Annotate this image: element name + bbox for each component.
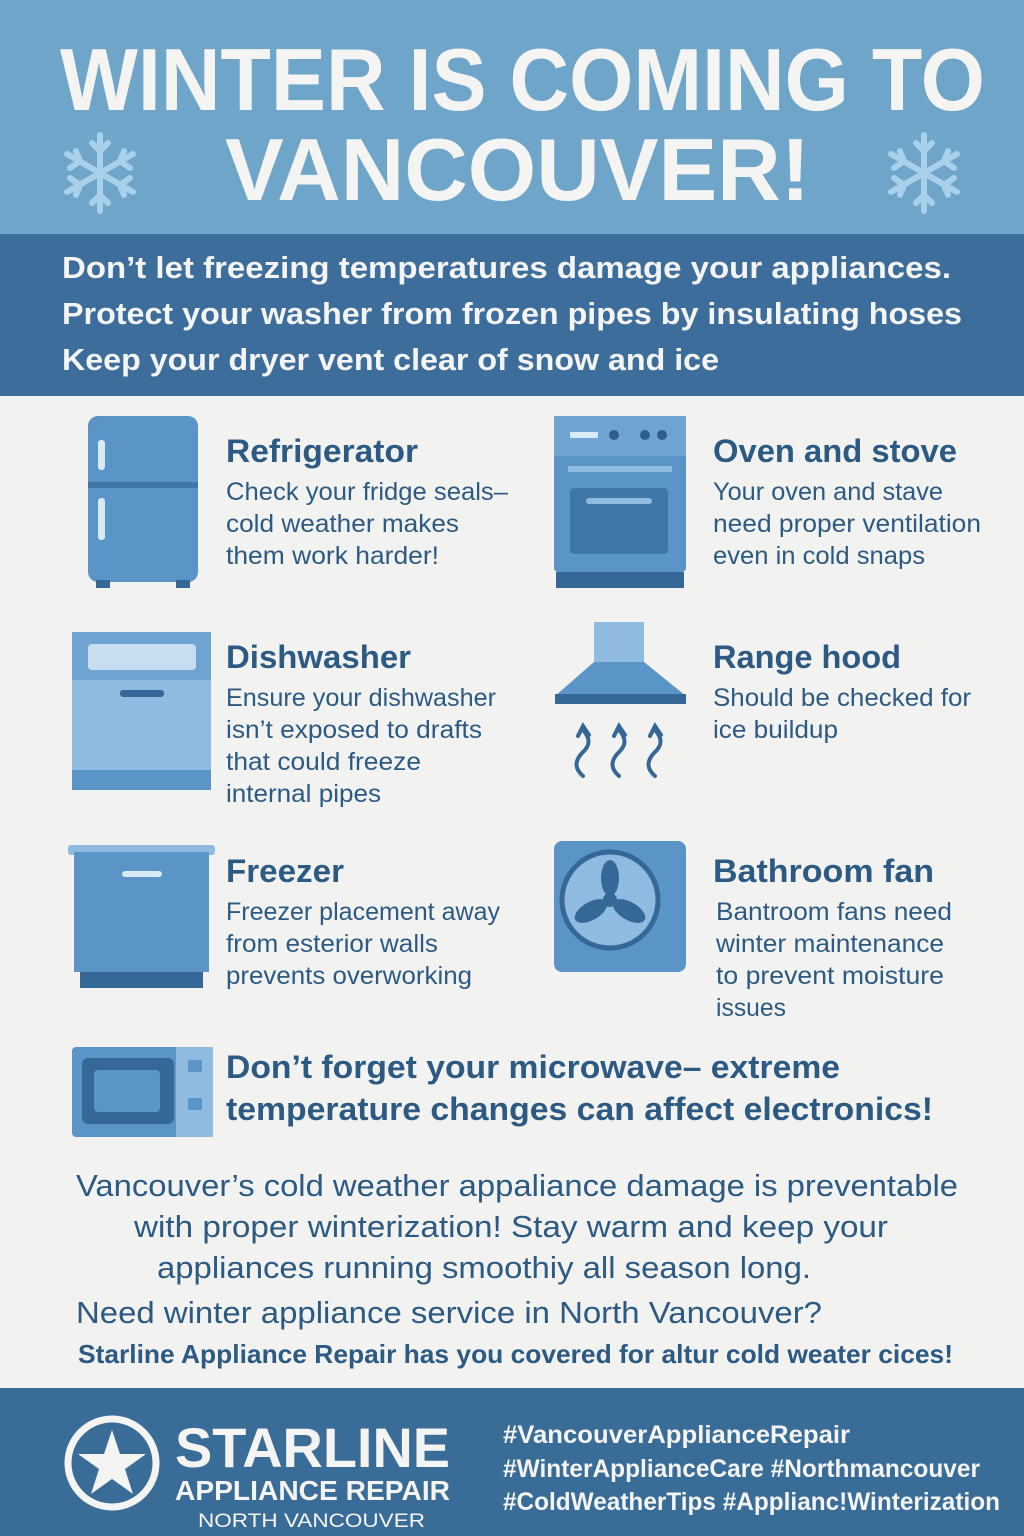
panel: dishwasher text: Dishwasher [226,639,411,675]
icon: snowflake left [67,135,133,211]
intro band: Protect your washer from frozen pipes by insulating hoses [62,296,962,331]
panel: dishwasher text: internal pipes [226,780,381,808]
panel: range hood text: Range hood [713,639,901,675]
icon: range hood [555,622,686,776]
panel: freezer text: Freezer placement away [226,898,500,926]
panel: bathroom fan text: Bantroom fans need [716,898,952,926]
callout: microwave: temperature changes can affect electronics! [226,1091,933,1127]
closing text: Vancouver’s cold weather appaliance damage is preventable [76,1168,958,1203]
closing text: with proper winterization! Stay warm and keep your [133,1209,888,1244]
panel: oven text: even in cold snaps [713,542,925,570]
panel: oven text: Your oven and stave [713,478,943,506]
logo: STARLINE [175,1416,450,1479]
icon: microwave [72,1047,213,1137]
header [0,0,1024,234]
icon: snowflake right [891,135,957,211]
intro band: Don’t let freezing temperatures damage your appliances. [62,250,951,285]
panel: dishwasher text: that could freeze [226,748,421,776]
title: WINTER IS COMING TO [60,30,985,129]
callout: microwave: Don’t forget your microwave– extreme [226,1049,840,1085]
logo: NORTH VANCOUVER [198,1511,425,1532]
panel: freezer text: Freezer [226,853,344,889]
panel: range hood text [713,639,971,744]
hashtags [503,1421,1000,1516]
panel: refrigerator text: Refrigerator [226,433,418,469]
title [60,30,985,219]
panel: bathroom fan text: winter maintenance [715,930,944,958]
panel: refrigerator text: them work harder! [226,542,439,570]
icon: dishwasher [72,632,211,790]
panel: dishwasher text: Ensure your dishwasher [226,684,496,712]
panel: freezer text: from esterior walls [226,930,438,958]
panel: refrigerator text: Check your fridge seals– [226,478,508,506]
panel: bathroom fan text: issues [716,994,786,1022]
panel: refrigerator text: cold weather makes [226,510,459,538]
panel: oven text [713,433,981,570]
footer [0,1388,1024,1536]
hashtags: #VancouverApplianceRepair [503,1421,850,1449]
closing text: Need winter appliance service in North Vancouver? [76,1295,822,1330]
logo: APPLIANCE REPAIR [175,1475,450,1506]
panel: bathroom fan text: to prevent moisture [716,962,944,990]
closing text [76,1168,958,1369]
panel: range hood text: ice buildup [713,716,838,744]
panel: range hood text: Should be checked for [713,684,971,712]
panel: refrigerator text [226,433,508,570]
icon: bathroom fan [554,841,686,972]
panel: bathroom fan text [713,853,952,1022]
title: VANCOUVER! [225,120,810,219]
closing text: appliances running smoothiy all season long. [157,1250,811,1285]
intro band: Keep your dryer vent clear of snow and ice [62,342,719,377]
panel: oven text: Oven and stove [713,433,957,469]
intro band [0,234,1024,396]
panel: freezer text [226,853,500,990]
icon: oven [554,416,686,588]
closing text: Starline Appliance Repair has you covered for altur cold weater cices! [78,1339,953,1369]
callout: microwave [226,1049,933,1127]
icon: freezer [68,845,215,988]
panel: dishwasher text: isn’t exposed to drafts [226,716,482,744]
panel: dishwasher text [226,639,496,808]
panel: freezer text: prevents overworking [226,962,472,990]
panel: bathroom fan text: Bathroom fan [713,853,934,889]
hashtags: #WinterApplianceCare #Northmancouver [503,1455,980,1483]
hashtags: #ColdWeatherTips #Applianc!Winterization [503,1488,1000,1516]
panel: oven text: need proper ventilation [713,510,981,538]
logo [68,1416,450,1532]
icon: refrigerator [88,416,198,588]
